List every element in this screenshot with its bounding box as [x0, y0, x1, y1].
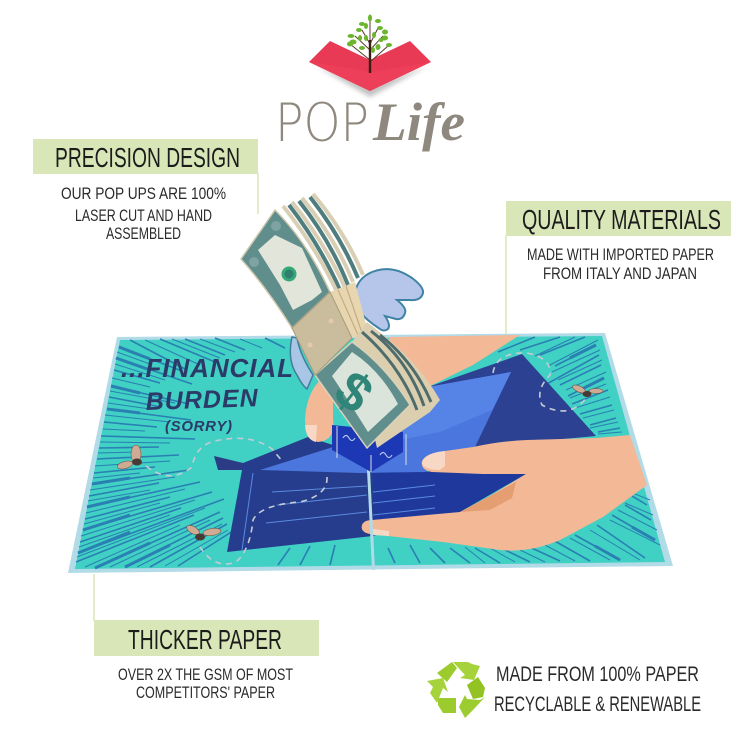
hand: finger gap: [460, 482, 516, 512]
pleats of paper band: [330, 282, 368, 338]
hand: bottom hand: [362, 435, 647, 551]
lower bill front with dollar sign: [315, 342, 410, 448]
text: thicker paper body: OVER 2X THE GSM OF MOST: [118, 665, 293, 684]
upper bill front: [241, 210, 330, 328]
icon: recycle symbol: [427, 662, 485, 718]
heading: thicker paper: THICKER PAPER: [128, 624, 282, 655]
logo wordmark POP: POP: [275, 93, 369, 154]
wallet: back tab: [214, 456, 243, 470]
card lettering: financial burden: [121, 353, 293, 435]
upper bill back layers: [283, 194, 363, 292]
heading: precision design: PRECISION DESIGN: [55, 142, 240, 173]
wallet: upper back: [428, 354, 596, 447]
right wing: [355, 269, 423, 330]
wallet: left body: [227, 437, 373, 552]
left wing: [290, 337, 313, 389]
fly: [116, 445, 142, 470]
card lettering: financial burden: ...FINANCIAL: [121, 353, 293, 383]
paper band: [292, 292, 352, 375]
logo wordmark Life: Life: [372, 92, 465, 152]
wallet: right pocket lines: [373, 485, 435, 515]
text: precision design body: LASER CUT AND HAND: [75, 206, 212, 225]
callout: precision design: [33, 139, 258, 243]
lower bill front with dollar sign: $: [323, 359, 384, 425]
callout: recyclable: [427, 662, 701, 718]
card lettering: financial burden: (SORRY): [165, 418, 232, 435]
card lettering: financial burden: BURDEN: [145, 384, 259, 416]
fly: [185, 523, 221, 540]
callout: quality materials: [506, 201, 731, 283]
hand: fingernails: [373, 451, 445, 536]
text: precision design body: OUR POP UPS ARE 100%: [61, 184, 226, 203]
sunburst rays: [76, 337, 660, 568]
text: precision design body: ASSEMBLED: [106, 224, 181, 243]
connector lines: [94, 173, 506, 621]
wallet: blue flap: [260, 372, 511, 473]
pop-up base: blue box: [332, 425, 406, 472]
hand: left fingernail: [305, 425, 317, 442]
dashed flight paths: [146, 353, 587, 564]
heading: precision design: [33, 139, 258, 174]
card teal background: [75, 336, 665, 569]
lower bill back layers: [352, 322, 440, 448]
hand: left fingertip: [305, 380, 333, 442]
wallet: right body: [373, 470, 526, 536]
card paper border: [68, 333, 673, 573]
text: quality materials body: FROM ITALY AND JAPAN: [543, 264, 697, 283]
text: thicker paper body: COMPETITORS' PAPER: [136, 683, 275, 702]
center fold: [367, 470, 375, 570]
heading: thicker paper: [94, 620, 319, 656]
panel: open pop-up card: [68, 333, 673, 573]
hand: top hand: [370, 335, 520, 400]
fly: [571, 383, 603, 397]
logo: Pop Life: [275, 14, 465, 154]
icon: red open book with tree: [309, 14, 431, 97]
pop-up: flying money: [241, 194, 440, 448]
wallet: pocket lines: [242, 473, 367, 550]
wallet: flap highlight: [400, 372, 511, 440]
callout: thicker paper: [94, 620, 319, 702]
